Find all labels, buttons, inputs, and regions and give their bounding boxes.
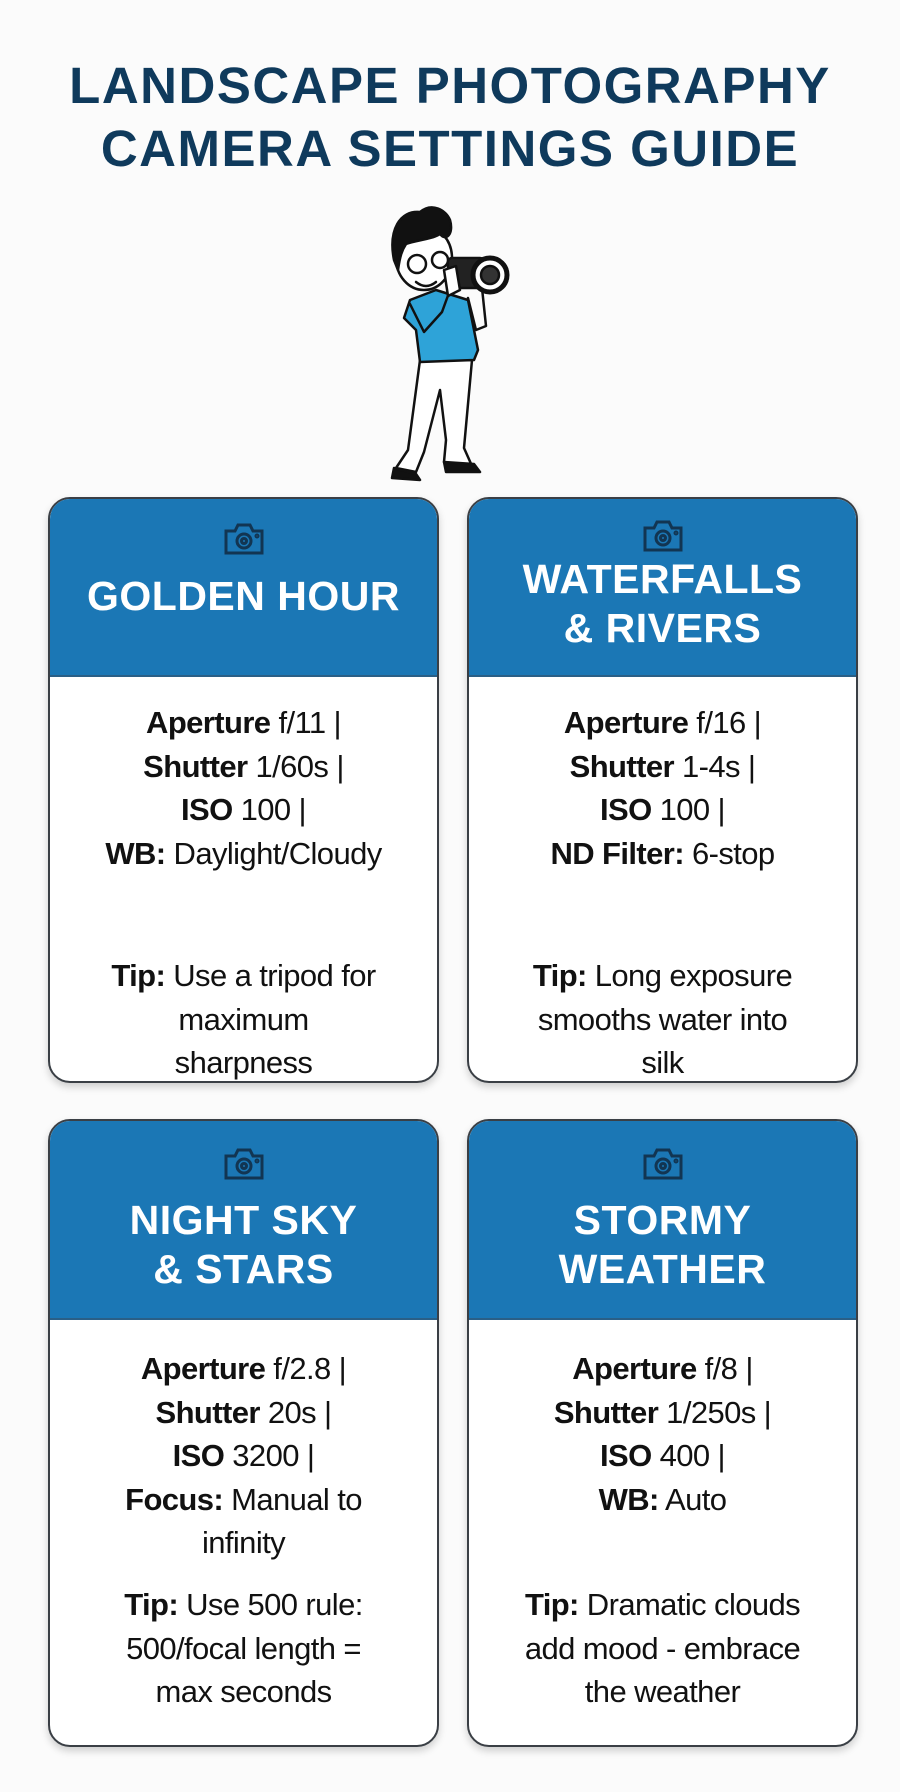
icon: camera — [644, 520, 682, 552]
header: night sky: NIGHT SKY — [130, 1197, 357, 1243]
tip: smooths water into — [538, 1002, 787, 1037]
settings — [105, 705, 382, 871]
header: night sky — [50, 1121, 437, 1320]
tip: Tip: Dramatic clouds — [525, 1587, 800, 1622]
tip: silk — [641, 1045, 684, 1080]
header: waterfalls: & RIVERS — [564, 605, 761, 651]
settings: Aperture f/8 | — [572, 1351, 753, 1386]
tip: Tip: Use a tripod for — [111, 958, 376, 993]
tip — [525, 1587, 800, 1709]
tip: add mood - embrace — [525, 1631, 800, 1666]
tip: Tip: Use 500 rule: — [124, 1587, 363, 1622]
settings: ND Filter: 6-stop — [550, 836, 775, 871]
tip: max seconds — [155, 1674, 332, 1709]
header: golden hour — [50, 499, 437, 677]
settings: WB: Auto — [599, 1482, 726, 1517]
illustration: photographer — [390, 206, 510, 482]
header: waterfalls: WATERFALLS — [523, 556, 802, 602]
settings: Shutter 1/250s | — [554, 1395, 771, 1430]
settings: ISO 400 | — [600, 1438, 725, 1473]
settings: ISO 3200 | — [173, 1438, 314, 1473]
settings: Aperture f/2.8 | — [141, 1351, 346, 1386]
icon: camera — [224, 524, 264, 554]
title — [69, 57, 831, 177]
settings: Aperture f/11 | — [146, 705, 341, 740]
title: CAMERA SETTINGS GUIDE — [101, 120, 799, 177]
header: stormy — [469, 1121, 856, 1320]
header: stormy: WEATHER — [559, 1246, 766, 1292]
panel: golden hour — [48, 497, 439, 1083]
settings: Shutter 1-4s | — [570, 749, 755, 784]
settings — [550, 705, 775, 871]
settings: Aperture f/16 | — [564, 705, 761, 740]
tip: sharpness — [175, 1045, 312, 1080]
settings: ISO 100 | — [600, 792, 725, 827]
title: LANDSCAPE PHOTOGRAPHY — [69, 57, 831, 114]
settings: ISO 100 | — [181, 792, 306, 827]
header: golden hour: GOLDEN HOUR — [87, 573, 400, 619]
settings: Focus: Manual to — [125, 1482, 362, 1517]
tip: the weather — [585, 1674, 740, 1709]
settings — [125, 1351, 362, 1560]
tip — [111, 958, 376, 1080]
panel: night sky — [48, 1119, 439, 1747]
header: night sky: & STARS — [153, 1246, 334, 1292]
icon: camera — [644, 1148, 682, 1180]
header: waterfalls — [469, 499, 856, 677]
header: stormy: STORMY — [574, 1197, 751, 1243]
settings: Shutter 20s | — [156, 1395, 331, 1430]
tip: maximum — [178, 1002, 309, 1037]
tip — [124, 1587, 363, 1709]
tip: 500/focal length = — [126, 1631, 361, 1666]
panel: waterfalls & rivers — [467, 497, 858, 1083]
panel: stormy weather — [467, 1119, 858, 1747]
settings: WB: Daylight/Cloudy — [105, 836, 382, 871]
icon: camera — [224, 1148, 264, 1180]
settings: infinity — [202, 1525, 285, 1560]
settings: Shutter 1/60s | — [143, 749, 344, 784]
settings — [554, 1351, 771, 1517]
tip: Tip: Long exposure — [533, 958, 792, 993]
tip — [533, 958, 792, 1080]
